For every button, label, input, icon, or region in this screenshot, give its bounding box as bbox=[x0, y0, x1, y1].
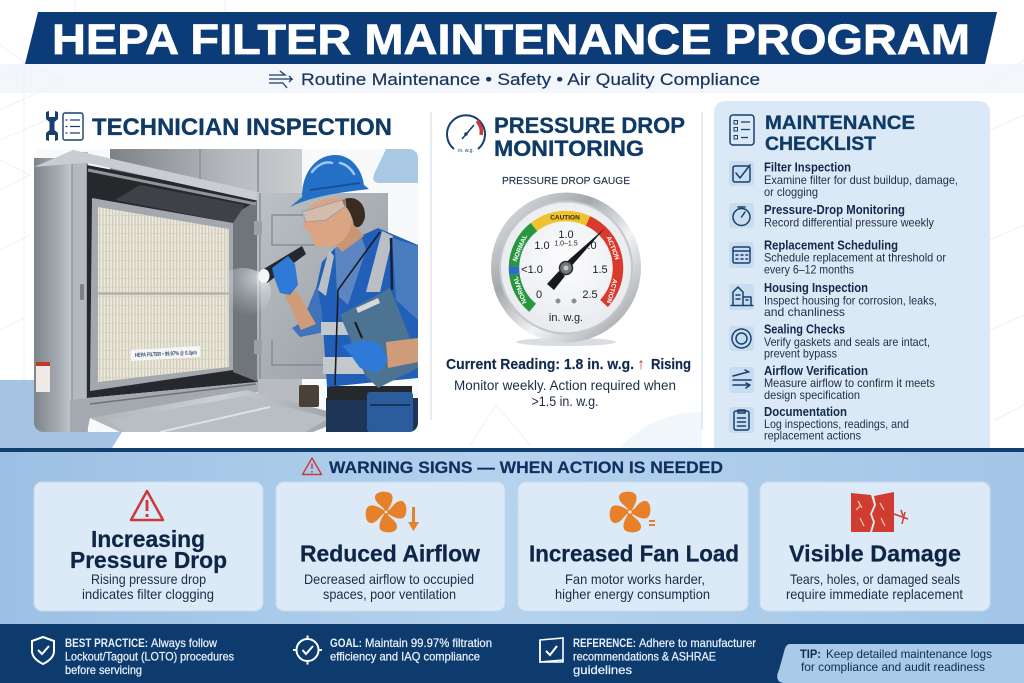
trousers and belt bbox=[326, 398, 418, 432]
card: reduced airflow bbox=[276, 482, 505, 611]
best practice note: before servicing bbox=[65, 663, 142, 677]
icon: warning triangle bbox=[302, 458, 322, 474]
checklist item: housing inspection: Housing Inspection bbox=[764, 281, 868, 295]
checklist item: housing inspection bbox=[729, 281, 937, 319]
gauge numbers: in. w.g. bbox=[549, 312, 583, 324]
icon: target check bbox=[293, 636, 322, 664]
gauge numbers: 1.0 bbox=[534, 240, 550, 252]
tip callout bbox=[777, 644, 1024, 683]
forearm lower bbox=[386, 338, 418, 368]
checklist item: airflow verification: Measure airflow to confirm it meets bbox=[764, 376, 935, 390]
checklist item: sealing checks: Verify gaskets and seals are intact, bbox=[764, 335, 930, 349]
illustration: technician inspecting HEPA filter housing bbox=[34, 149, 418, 433]
lanyard bbox=[335, 232, 380, 385]
heading: maintenance checklist: CHECKLIST bbox=[765, 134, 876, 155]
title banner: HEPA FILTER MAINTENANCE PROGRAM bbox=[52, 17, 970, 64]
card: reduced airflow: Decreased airflow to occupied bbox=[304, 571, 474, 587]
neck and head bbox=[336, 222, 364, 252]
reference note: recommendations & ASHRAE bbox=[573, 650, 716, 664]
checklist item: sealing checks: prevent bypass bbox=[764, 346, 837, 360]
clipboard bbox=[340, 288, 418, 388]
upper arm and sleeve bbox=[292, 262, 323, 337]
card: increased fan load: Increased Fan Load bbox=[529, 540, 739, 566]
card: increased fan load: Fan motor works harder, bbox=[565, 571, 705, 587]
card: visible damage: Visible Damage bbox=[789, 540, 961, 566]
monitoring note: >1.5 in. w.g. bbox=[532, 393, 598, 409]
panel: technician inspection bbox=[34, 111, 418, 433]
forearm bbox=[283, 291, 316, 330]
checklist item: replacement scheduling bbox=[729, 238, 946, 276]
checklist item: filter inspection: Examine filter for dust buildup, damage, bbox=[764, 173, 958, 187]
checklist item: sealing checks bbox=[729, 322, 930, 360]
checklist item: documentation: Documentation bbox=[764, 405, 847, 419]
card: reduced airflow: spaces, poor ventilation bbox=[323, 586, 456, 602]
card: increased fan load bbox=[518, 482, 748, 611]
icon: book check bbox=[540, 638, 563, 662]
warning sticker bbox=[36, 366, 50, 392]
checklist item: airflow verification: Airflow Verification bbox=[764, 364, 868, 378]
best practice note: BEST PRACTICE: bbox=[65, 636, 148, 650]
best practice note: Always follow bbox=[151, 636, 217, 650]
heading: maintenance checklist bbox=[730, 113, 915, 155]
flashlight bbox=[262, 246, 306, 283]
icon: fan with load mark bbox=[610, 492, 655, 532]
tip callout: for compliance and audit readiness bbox=[801, 660, 985, 674]
upper glove bbox=[272, 256, 298, 295]
goal note: GOAL: bbox=[330, 636, 362, 650]
gauge band labels: NORMAL bbox=[512, 275, 529, 304]
monitoring note bbox=[454, 377, 676, 409]
heading: technician inspection: TECHNICIAN INSPECTION bbox=[92, 114, 392, 141]
heading: maintenance checklist: MAINTENANCE bbox=[765, 113, 915, 134]
gauge numbers: .0 bbox=[587, 240, 597, 252]
gauge numbers: 1.5 bbox=[592, 264, 608, 276]
gauge band labels: CAUTION bbox=[550, 214, 580, 222]
pressure gauge bbox=[491, 192, 641, 346]
current reading: ↑ bbox=[637, 356, 645, 373]
divider right bbox=[701, 112, 703, 430]
icon: airflow bbox=[269, 71, 292, 88]
hard hat bbox=[290, 155, 369, 207]
goal note: Maintain 99.97% filtration bbox=[365, 636, 492, 650]
heading: pressure drop monitoring: PRESSURE DROP bbox=[494, 113, 685, 138]
decorative blue corner bbox=[373, 149, 418, 183]
checklist item: filter inspection bbox=[729, 160, 958, 199]
card: reduced airflow: Reduced Airflow bbox=[300, 540, 481, 566]
access tray bbox=[90, 390, 350, 432]
gauge numbers: 1.0–1.5 bbox=[554, 240, 578, 248]
gauge numbers: 2.5 bbox=[582, 289, 598, 301]
gauge band labels: NORMAL bbox=[512, 234, 529, 263]
checklist item: pressure-drop monitoring: Pressure-Drop Monitoring bbox=[764, 203, 905, 217]
icon: wrench and list bbox=[46, 111, 83, 141]
card: visible damage: Tears, holes, or damaged seals bbox=[790, 571, 960, 587]
checklist item: airflow verification bbox=[729, 364, 935, 402]
torso bbox=[317, 228, 418, 387]
icon: checklist bbox=[730, 115, 754, 145]
checklist item: airflow verification: design specification bbox=[764, 388, 860, 402]
lower glove bbox=[342, 340, 388, 373]
gauge needle bbox=[547, 228, 605, 290]
filter label: HEPA FILTER • 99.97% @ 0.3µm bbox=[135, 350, 197, 359]
checklist item: pressure-drop monitoring: Record differential pressure weekly bbox=[764, 216, 934, 230]
checklist item: replacement scheduling: every 6–12 months bbox=[764, 262, 854, 276]
icon: torn filter bbox=[851, 492, 908, 532]
filter label bbox=[131, 346, 200, 361]
gauge band labels: ACTION bbox=[605, 235, 621, 261]
reference note: Adhere to manufacturer bbox=[639, 636, 756, 650]
gauge caption: PRESSURE DROP GAUGE bbox=[502, 175, 630, 187]
open door bbox=[257, 193, 388, 379]
heading: pressure drop monitoring bbox=[447, 113, 685, 161]
strap and sleeve bbox=[392, 238, 418, 320]
technician bbox=[258, 155, 418, 432]
best practice note: Lockout/Tagout (LOTO) procedures bbox=[65, 650, 234, 664]
checklist item: replacement scheduling: Schedule replacement at threshold or bbox=[764, 250, 946, 264]
card: increasing pressure drop bbox=[34, 482, 263, 611]
housing side bbox=[34, 158, 72, 433]
checklist item: documentation bbox=[729, 405, 909, 442]
reference note: REFERENCE: bbox=[573, 636, 636, 650]
card: increasing pressure drop: Rising pressure drop bbox=[91, 571, 206, 587]
card: increasing pressure drop: indicates filter clogging bbox=[82, 586, 214, 602]
housing opening bbox=[87, 165, 258, 398]
panel: maintenance checklist bbox=[714, 101, 990, 448]
safety glasses bbox=[302, 199, 346, 222]
reference note bbox=[540, 636, 756, 677]
checklist item: sealing checks: Sealing Checks bbox=[764, 322, 845, 336]
gauge band labels: ACTION bbox=[605, 278, 618, 304]
reflective stripes bbox=[366, 231, 393, 292]
subtitle: Routine Maintenance • Safety • Air Quality Compliance bbox=[301, 70, 760, 89]
heading: pressure drop monitoring: MONITORING bbox=[494, 136, 644, 161]
card: increasing pressure drop: Pressure Drop bbox=[70, 547, 227, 573]
monitoring note: Monitor weekly. Action required when bbox=[454, 377, 676, 393]
gauge numbers: <1.0 bbox=[521, 264, 543, 276]
checklist item: documentation: Log inspections, readings, and bbox=[764, 417, 909, 431]
flashlight beam bbox=[228, 268, 271, 313]
gauge bands bbox=[514, 216, 618, 308]
icon: warning triangle bbox=[131, 491, 163, 520]
footer bar bbox=[0, 624, 1024, 683]
shirt placket bbox=[335, 238, 366, 305]
gauge numbers bbox=[521, 229, 608, 324]
gauge band labels bbox=[512, 214, 621, 304]
icon: fan with down arrow bbox=[366, 492, 419, 532]
checklist item: housing inspection: and chanliness bbox=[764, 305, 845, 319]
checklist item: filter inspection: or clogging bbox=[764, 185, 818, 199]
panel: warning signs bbox=[0, 448, 1024, 625]
wall behind housing bbox=[110, 149, 302, 193]
reference note: guidelines bbox=[573, 663, 632, 677]
checklist item: housing inspection: Inspect housing for corrosion, leaks, bbox=[764, 294, 937, 308]
tip callout: Keep detailed maintenance logs bbox=[826, 647, 992, 661]
checklist item: filter inspection: Filter Inspection bbox=[764, 160, 851, 174]
icon: gauge: in. w.g. bbox=[458, 148, 474, 154]
checklist item: pressure-drop monitoring bbox=[729, 203, 934, 230]
checklist item: documentation: replacement actions bbox=[764, 428, 861, 442]
card: increased fan load: higher energy consumption bbox=[555, 586, 710, 602]
warning heading: WARNING SIGNS — WHEN ACTION IS NEEDED bbox=[329, 458, 723, 477]
card: visible damage: require immediate replacement bbox=[786, 586, 963, 602]
tip callout: TIP: bbox=[800, 647, 821, 661]
goal note: efficiency and IAQ compliance bbox=[330, 650, 480, 664]
current reading: Current Reading: 1.8 in. w.g. bbox=[446, 356, 634, 373]
best practice note bbox=[32, 636, 234, 677]
divider left bbox=[430, 112, 432, 420]
HEPA filter bbox=[90, 198, 233, 391]
current reading: Rising bbox=[651, 356, 691, 373]
checklist item: replacement scheduling: Replacement Scheduling bbox=[764, 238, 898, 252]
gauge numbers: 1.0 bbox=[558, 229, 574, 241]
icon: shield bbox=[32, 637, 54, 664]
gauge numbers: 0 bbox=[536, 289, 542, 301]
housing ledge bbox=[70, 382, 258, 432]
goal note bbox=[293, 636, 492, 664]
panel: pressure drop monitoring bbox=[446, 113, 691, 409]
card: increasing pressure drop: Increasing bbox=[91, 526, 205, 552]
card: visible damage bbox=[760, 482, 990, 611]
icon: gauge bbox=[447, 115, 485, 154]
